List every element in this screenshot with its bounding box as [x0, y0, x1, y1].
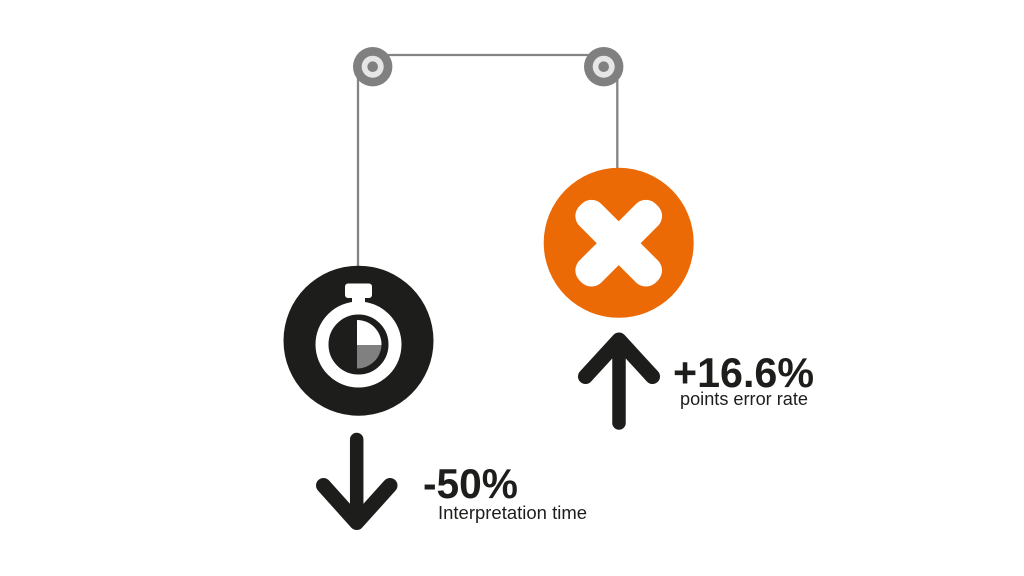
value: -50%: -50% [423, 460, 518, 507]
stat: -50% interpretation time [423, 460, 587, 523]
icon: cross in orange circle [542, 167, 695, 320]
value: +16.6%: +16.6% [673, 349, 814, 396]
stat: +16.6% points error rate [673, 349, 814, 409]
icon: right pin [584, 47, 623, 86]
icon: left pin [353, 47, 392, 86]
arrow: down [324, 440, 390, 522]
label: points error rate: points error rate [680, 389, 808, 409]
label: Interpretation time: Interpretation time [438, 503, 587, 523]
arrow: up [586, 340, 652, 423]
icon: stopwatch in black circle [284, 266, 434, 416]
connector lines between pins and circles [358, 55, 617, 266]
